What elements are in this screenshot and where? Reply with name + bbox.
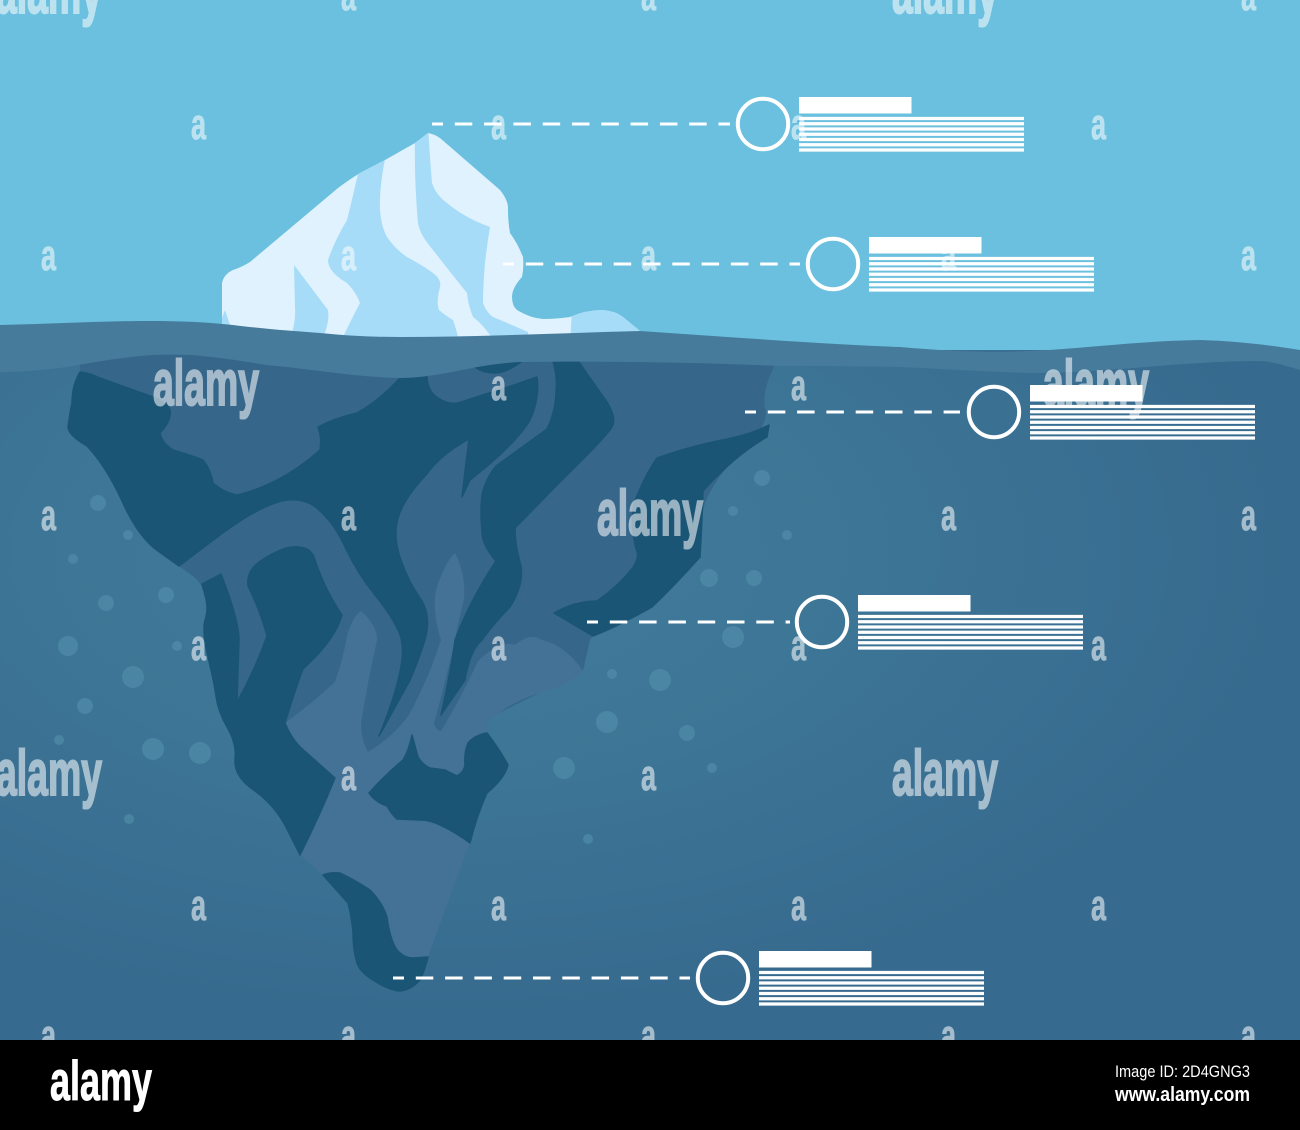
watermark: repeated small letters: a [491, 621, 506, 670]
watermark: repeated small letters: a [41, 1011, 56, 1060]
watermark: stock photo wordmarks [0, 0, 1149, 809]
watermark: repeated small letters: a [341, 1011, 356, 1060]
callout 1: dashed leader [432, 122, 730, 126]
watermark: repeated small letters: a [791, 100, 806, 149]
callout 5: dashed leader [393, 976, 690, 980]
watermark: repeated small letters: a [491, 881, 506, 930]
dark facet: lower left body [202, 547, 342, 855]
iceberg below water [68, 355, 774, 991]
footer wordmark: alamy [50, 1049, 152, 1112]
callout 1: marker and text block [738, 97, 1024, 150]
dark facet: right wedge [554, 425, 769, 636]
watermark: repeated small letters: a [491, 361, 506, 410]
watermark: repeated small letters: a [1091, 881, 1106, 930]
submerged base shape [70, 355, 774, 991]
watermark: repeated small letters: a [791, 621, 806, 670]
dark facet: right stream [441, 355, 614, 715]
watermark: repeated small letters: a [1241, 231, 1256, 280]
watermark: repeated small letters: a [641, 1011, 656, 1060]
watermark: repeated small letters: a [1241, 1011, 1256, 1060]
watermark: repeated small letters: a [1091, 621, 1106, 670]
watermark: repeated small letters: a [1091, 100, 1106, 149]
watermark: repeated small letters: a [191, 881, 206, 930]
watermark: stock photo wordmarks: alamy [1043, 347, 1149, 419]
watermark: repeated small letters: a [791, 361, 806, 410]
dark facet: bottom tip [323, 873, 428, 991]
deep water [0, 350, 1300, 1040]
callout 4: marker and text block [797, 595, 1083, 648]
watermark: repeated small letters: a [791, 881, 806, 930]
iceberg above water [222, 133, 640, 337]
iceberg tip shaded facet: left sliver [222, 310, 230, 325]
watermark: repeated small letters: a [491, 100, 506, 149]
watermark: repeated small letters: a [341, 231, 356, 280]
iceberg tip base shape [222, 133, 640, 336]
surface water band [0, 321, 1300, 378]
callout 2: dashed leader [503, 262, 800, 266]
website: www.alamy.com [1114, 1084, 1250, 1106]
dark facet: small top patch [473, 362, 521, 373]
watermark: repeated small letters: a [1241, 491, 1256, 540]
light facet: lower body [285, 553, 583, 965]
watermark: repeated small letters: a [341, 491, 356, 540]
iceberg tip shaded facet: lower left [292, 265, 328, 334]
callout 3: dashed leader [745, 410, 960, 414]
iceberg tip shaded facet: right shelf [570, 310, 640, 334]
watermark: repeated small letters: a [941, 1011, 956, 1060]
watermark: repeated small letters: a [941, 231, 956, 280]
callout 3: marker and text block [969, 385, 1255, 438]
watermark: repeated small letters: a [341, 751, 356, 800]
watermark: repeated small letters: a [641, 231, 656, 280]
watermark: repeated small letters: a [41, 231, 56, 280]
image id: Image ID: 2D4GNG3 [1115, 1062, 1250, 1081]
watermark: stock photo wordmarks: alamy [153, 347, 259, 419]
underwater bubbles [54, 470, 792, 844]
callout 4: dashed leader [587, 620, 790, 624]
callout 5: marker and text block [698, 951, 984, 1004]
dark facet: lower centre [369, 733, 508, 843]
dark facet: upper left and centre [68, 372, 538, 736]
watermark: repeated small letters: a [641, 751, 656, 800]
watermark: repeated small letters: a [191, 621, 206, 670]
watermark: repeated small letters: a [41, 491, 56, 540]
sky background [0, 0, 1300, 400]
footer bar [0, 1040, 1300, 1130]
iceberg tip shaded facet: right [415, 125, 530, 345]
watermark: repeated small letters: a [941, 491, 956, 540]
callout 2: marker and text block [808, 237, 1094, 290]
watermark: stock photo wordmarks: alamy [597, 477, 703, 549]
watermark: repeated small letters: a [191, 100, 206, 149]
watermark: stock photo wordmarks: alamy [0, 737, 102, 809]
iceberg tip shaded facet: centre [328, 160, 458, 337]
watermark: stock photo wordmarks: alamy [892, 737, 998, 809]
